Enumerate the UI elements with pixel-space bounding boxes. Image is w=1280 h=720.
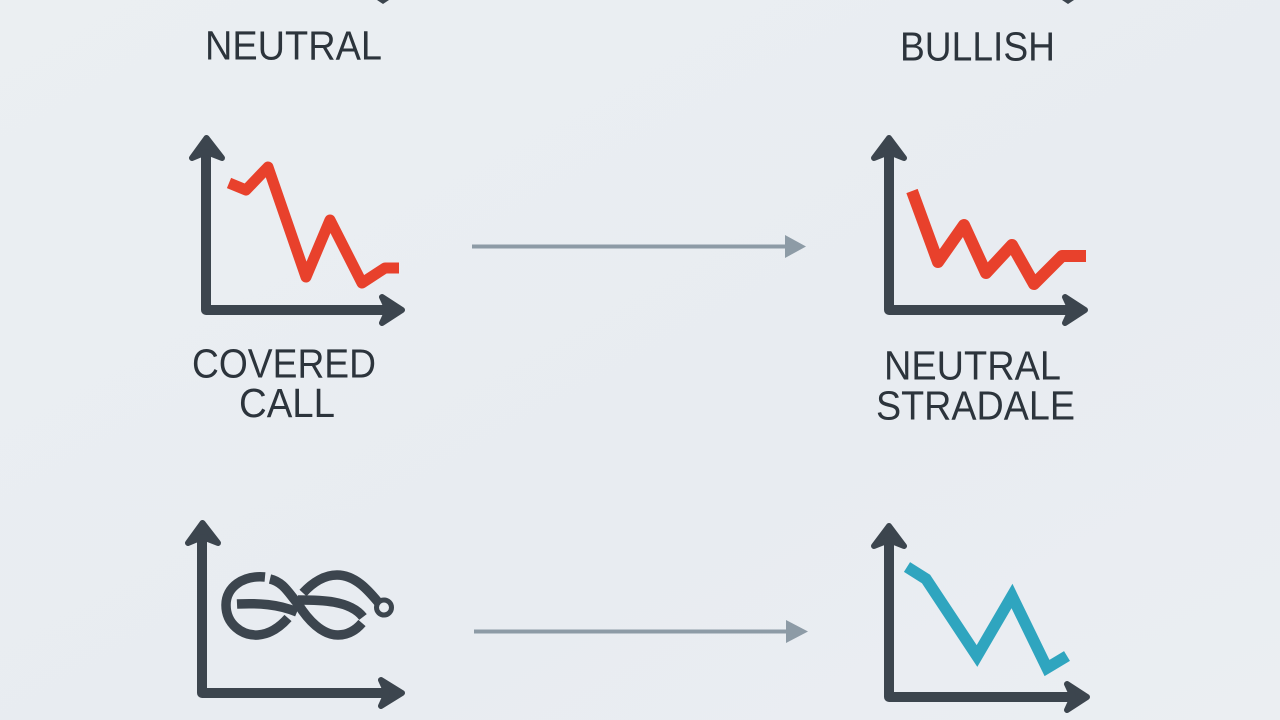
label: neutral straddle: NEUTRAL — [884, 342, 1061, 388]
label: covered call — [192, 340, 376, 426]
label: neutral straddle — [876, 342, 1075, 428]
cropped arrow tip: right — [1062, 0, 1074, 4]
label: neutral straddle: STRADALE — [876, 382, 1075, 428]
arrow: infinity to teal chart — [474, 620, 808, 643]
arrow: covered call to neutral straddle — [472, 235, 806, 258]
chart: neutral straddle — [874, 138, 1086, 323]
heading: neutral: NEUTRAL — [205, 22, 382, 68]
icon: infinity loop — [226, 575, 392, 635]
heading: bullish: BULLISH — [900, 24, 1055, 70]
label: covered call: COVERED — [192, 340, 376, 386]
chart: infinity knot — [188, 523, 402, 706]
chart: covered call — [192, 138, 402, 323]
label: covered call: CALL — [239, 380, 335, 426]
chart: teal line — [874, 526, 1087, 710]
cropped arrow tip: left — [377, 0, 389, 4]
